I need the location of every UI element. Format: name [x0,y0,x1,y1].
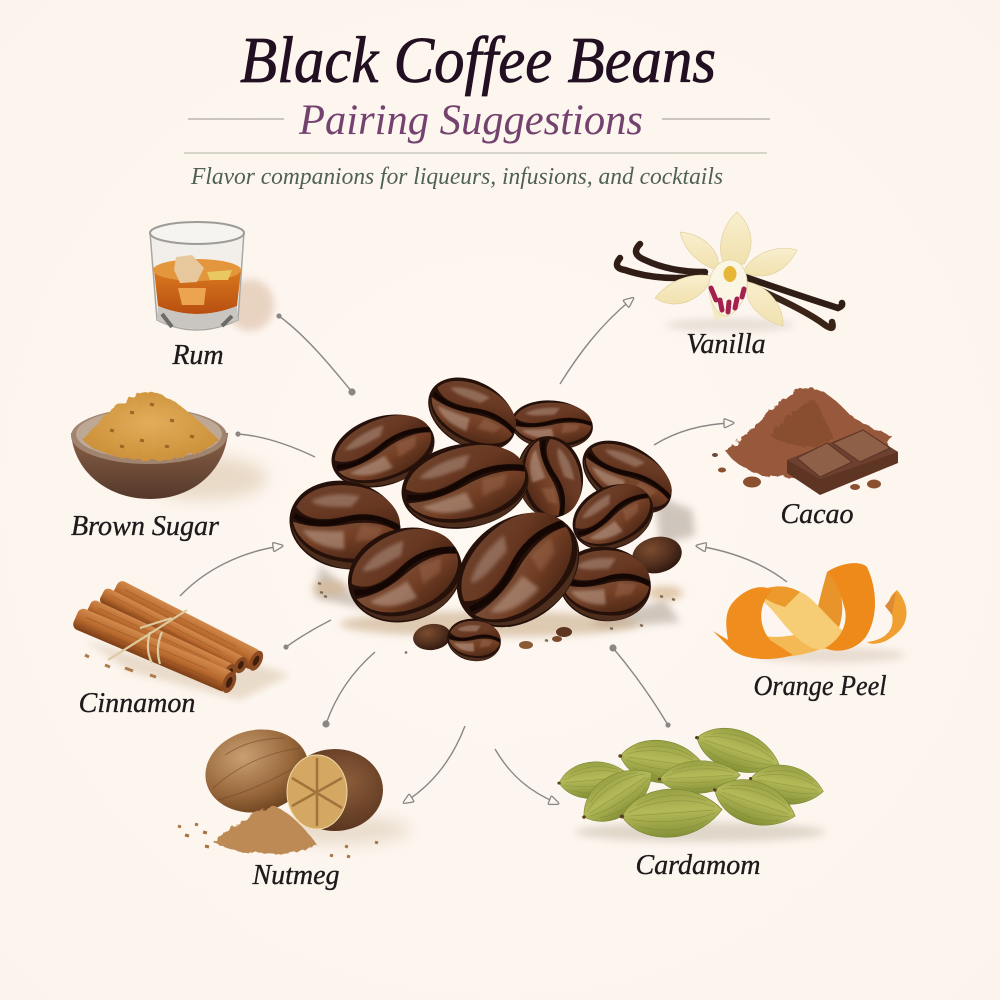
arrow: cardamom top [613,648,668,725]
icon: vanilla flower and pods [617,212,842,332]
label: Cardamom: Cardamom [636,850,760,881]
label: Brown Sugar: Brown Sugar [71,510,220,542]
subtitle rule right [662,118,770,120]
subtitle: Pairing Suggestions: Pairing Suggestions [298,97,643,144]
tagline: Flavor companions for liqueurs, infusions, and cocktails [190,164,723,190]
arrow: nutmeg left [326,652,375,724]
icon: rum glass [150,222,274,331]
arrow: nutmeg right [405,726,465,802]
icon: brown sugar bowl [71,392,267,500]
arrow: cacao [654,423,732,445]
icon: nutmeg [178,720,410,857]
icon: cardamom pods [556,718,827,842]
subtitle rule left [188,118,284,120]
icon: cinnamon sticks [71,579,290,700]
arrow: to cinnamon upper [180,546,281,596]
arrow: orange peel [698,546,787,582]
label: Cinnamon: Cinnamon [79,688,195,719]
label: Nutmeg: Nutmeg [251,860,340,891]
icon: cacao powder and chocolate [712,388,898,495]
arrow: cardamom bottom [495,749,557,803]
arrow: vanilla [560,299,632,384]
arrow: rum to beans [279,316,352,392]
icon: orange peel [713,563,907,663]
title: Black Coffee Beans [240,24,716,97]
arrow: cinnamon lower [286,620,331,647]
label: Cacao: Cacao [780,499,854,530]
arrow: brown sugar [238,434,315,457]
label: Rum: Rum [171,340,224,371]
heading divider [184,152,767,154]
label: Orange Peel: Orange Peel [754,671,887,702]
central coffee beans pile [281,363,695,665]
label: Vanilla: Vanilla [686,329,766,360]
